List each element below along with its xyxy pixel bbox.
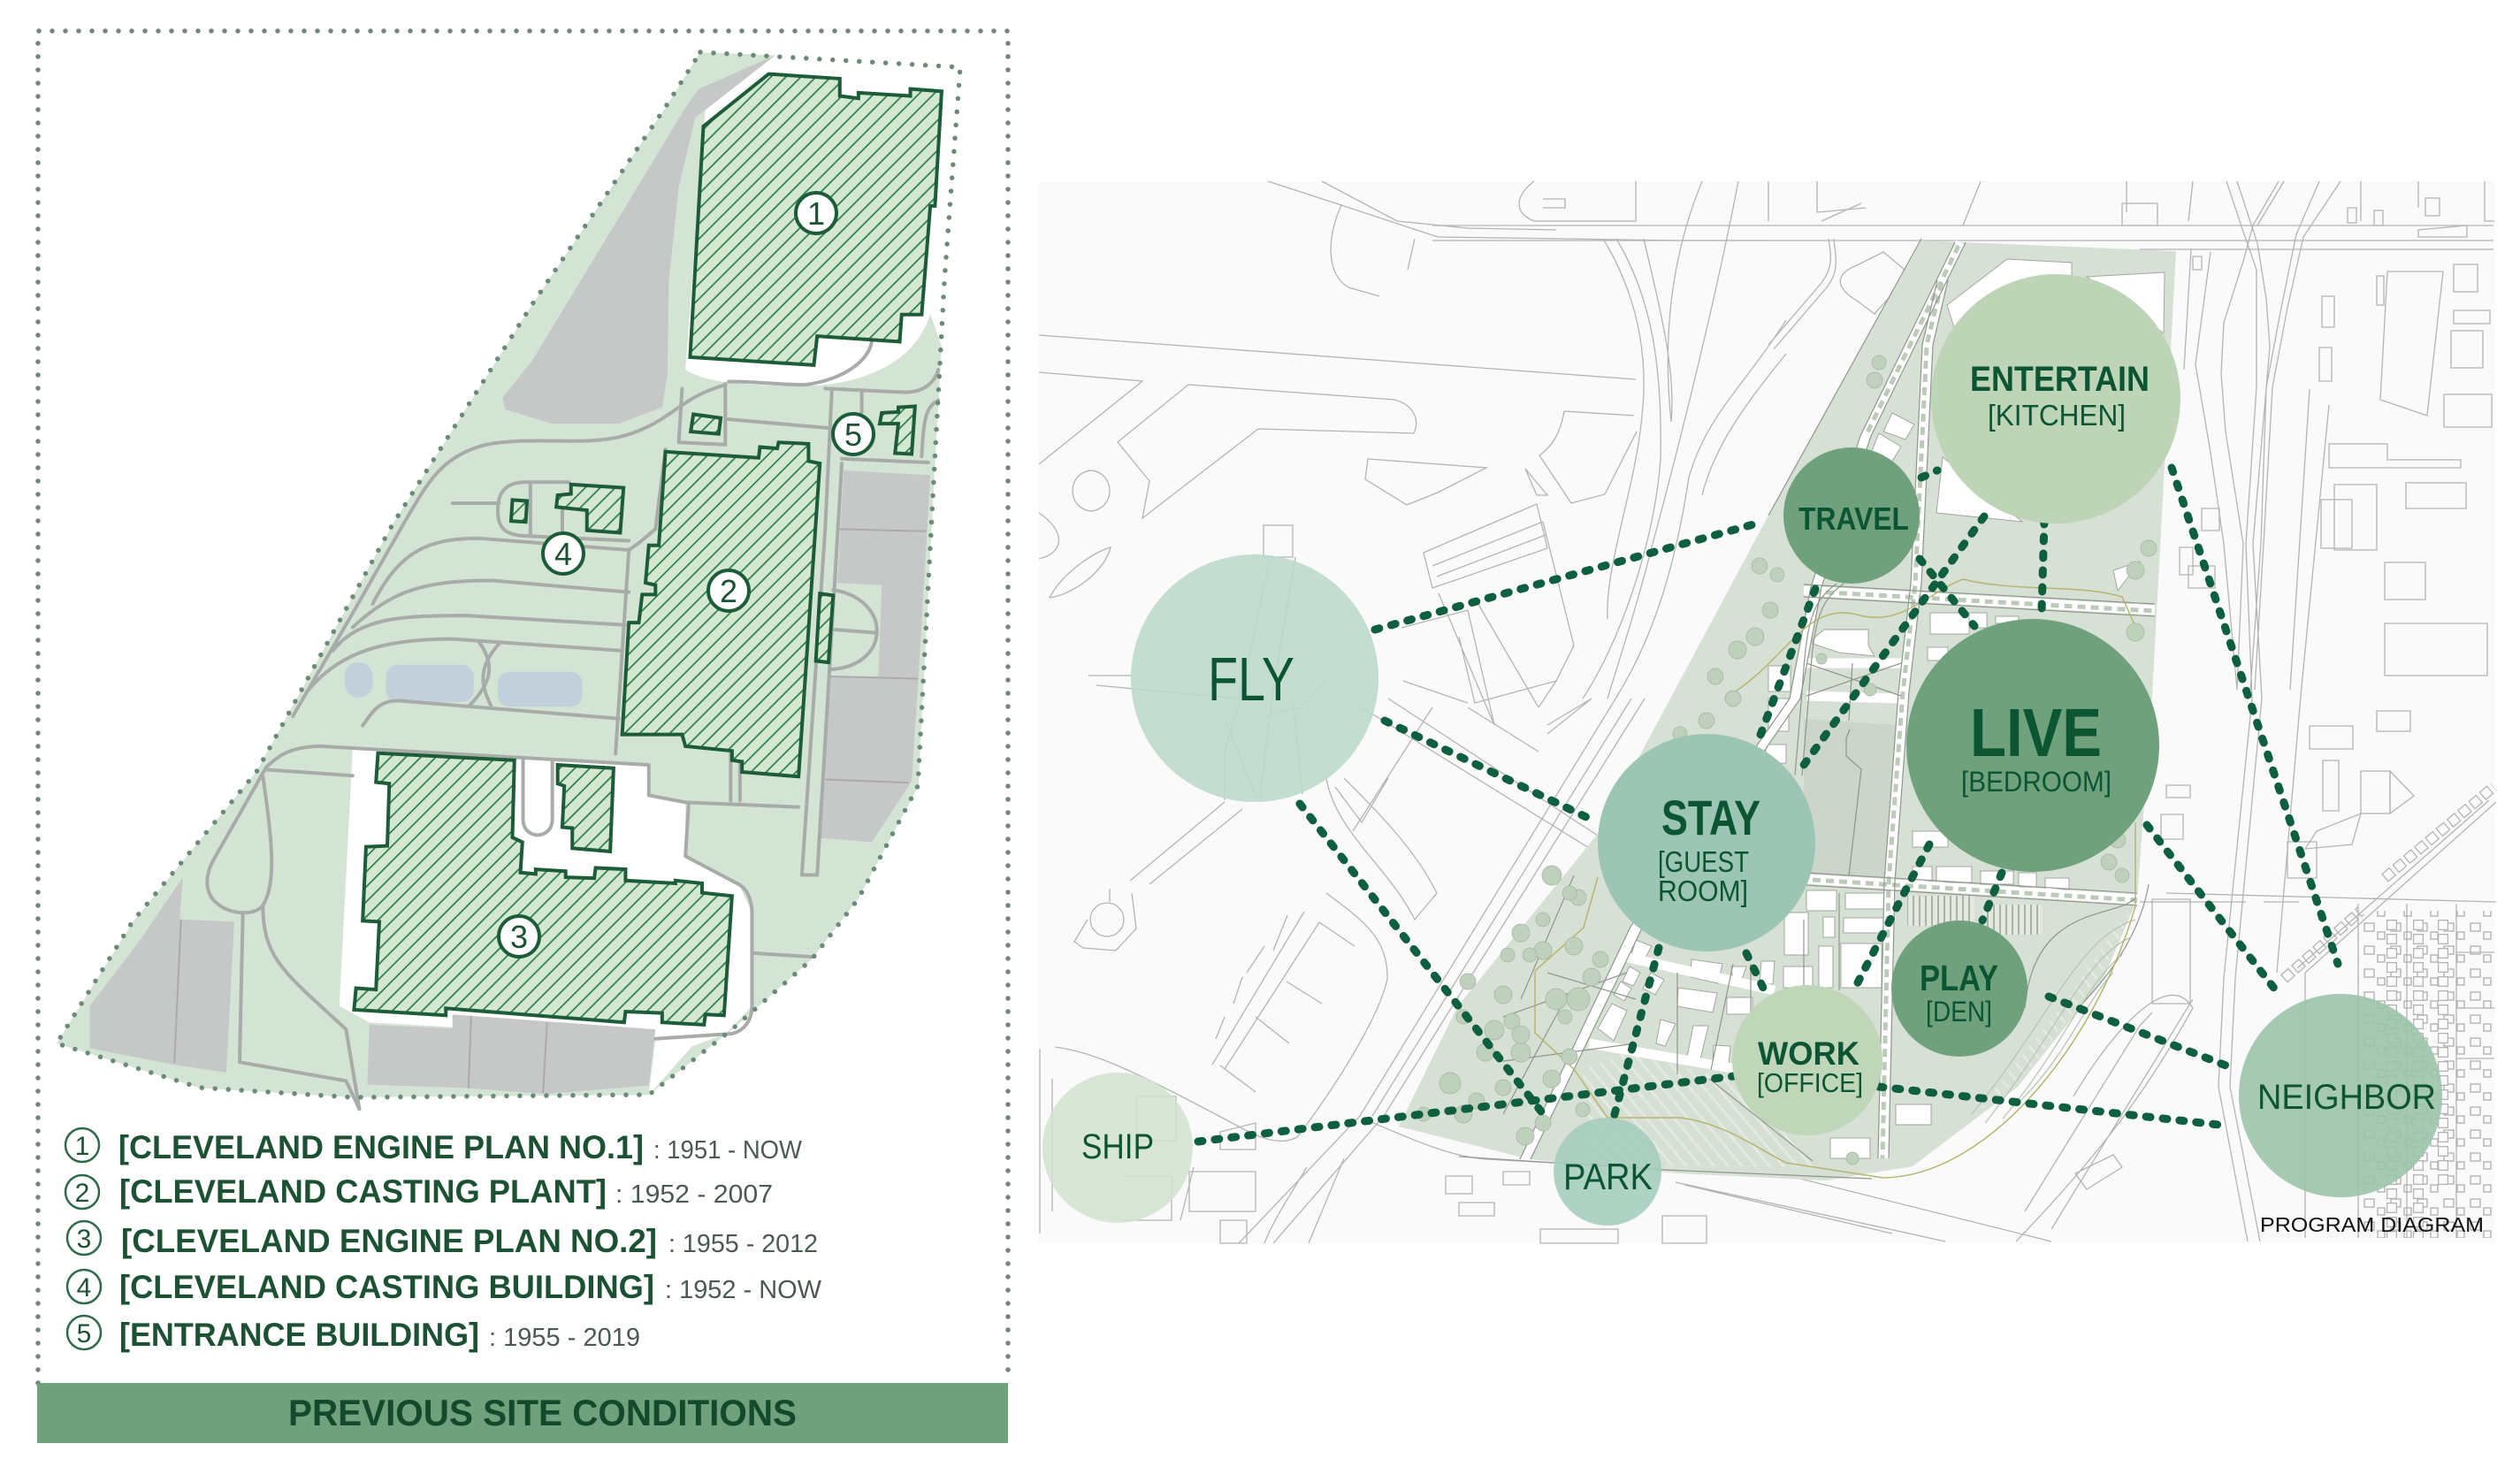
- legend: [65, 1128, 822, 1353]
- field stripes: [1907, 896, 2043, 935]
- retention ponds: [345, 662, 583, 707]
- central lawn: [1804, 719, 1898, 878]
- trees: [1417, 355, 2157, 1165]
- map marker 4: [543, 533, 584, 574]
- legend row 1: : 1951 - NOW: [653, 1136, 803, 1165]
- building: cleveland engine plant no.1: [690, 74, 942, 365]
- node: stay: STAY: [1661, 790, 1760, 845]
- map marker 5: [833, 414, 874, 455]
- white building footprints: [1598, 259, 2165, 1158]
- dotted panel frame: [38, 31, 1008, 1383]
- node: entertain: ENTERTAIN: [1970, 360, 2150, 399]
- site ground: [1399, 241, 2176, 1180]
- legend row 1: [CLEVELAND ENGINE PLAN NO.1]: [118, 1129, 644, 1165]
- node: park: [1554, 1118, 1661, 1226]
- south lawn stripes: [1583, 911, 2131, 1167]
- site roads: [207, 341, 938, 1109]
- node: ship: SHIP: [1081, 1127, 1154, 1166]
- node: fly: FLY: [1208, 645, 1294, 714]
- building: cleveland casting plant: [622, 442, 820, 776]
- node: neighbor: NEIGHBOR: [2257, 1078, 2436, 1117]
- node: neighbor: [2239, 994, 2442, 1197]
- site ground: [57, 52, 942, 1097]
- node: live: LIVE: [1970, 695, 2102, 771]
- building: cleveland casting building: [556, 485, 623, 532]
- legend row 3: 3: [77, 1225, 91, 1254]
- legend row 2: 2: [75, 1179, 89, 1208]
- legend row 5: [67, 1316, 640, 1353]
- site boundary dotted line: [57, 52, 960, 1097]
- legend row 2: [CLEVELAND CASTING PLANT]: [119, 1173, 607, 1210]
- map marker 4: 4: [554, 536, 572, 572]
- map marker 3: [499, 916, 539, 957]
- legend row 5: : 1955 - 2019: [489, 1324, 640, 1352]
- legend row 4: : 1952 - NOW: [665, 1276, 822, 1304]
- east buildings: [2075, 198, 2492, 1189]
- node: work: [1732, 985, 1882, 1135]
- node: work: WORK: [1758, 1035, 1859, 1072]
- white yard around building 3: [340, 749, 752, 1095]
- map marker 2: 2: [720, 573, 737, 609]
- map marker 1: [796, 193, 836, 233]
- panel: previous site conditions: [37, 31, 1008, 1443]
- east rail lines: [2150, 181, 2341, 1241]
- building: entrance building: [880, 407, 915, 455]
- node: travel: [1783, 447, 1920, 584]
- street tree rows: [1813, 246, 2155, 1158]
- node: entertain: [KITCHEN]: [1988, 399, 2126, 432]
- site streets: [1525, 242, 2155, 1159]
- node: play: [DEN]: [1926, 996, 1992, 1027]
- node: work: [OFFICE]: [1757, 1067, 1863, 1098]
- map marker 1: 1: [807, 195, 825, 232]
- node: stay: [GUEST: [1658, 845, 1749, 878]
- legend row 1: 1: [75, 1132, 89, 1161]
- building: cleveland engine plant no.2: [354, 753, 732, 1025]
- underlying lines inside fly circle: [1088, 525, 1326, 1220]
- legend row 4: [CLEVELAND CASTING BUILDING]: [119, 1269, 654, 1305]
- legend row 3: [67, 1221, 818, 1259]
- node: ship: [1042, 1073, 1193, 1223]
- map background: [1039, 181, 2494, 1243]
- context linework: [1039, 181, 2494, 1243]
- building: casting building annex: [511, 500, 527, 522]
- legend row 3: [CLEVELAND ENGINE PLAN NO.2]: [121, 1223, 657, 1259]
- legend row 3: : 1955 - 2012: [668, 1230, 818, 1258]
- legend row 2: : 1952 - 2007: [615, 1180, 773, 1209]
- node: live: [BEDROOM]: [1961, 766, 2111, 798]
- node: play: PLAY: [1920, 958, 1998, 998]
- building: engine plant annex: [558, 765, 614, 852]
- node: stay: [1598, 734, 1815, 951]
- node: fly: [1131, 554, 1378, 802]
- connection lines: [1198, 468, 2338, 1142]
- street edges: [1459, 239, 2155, 1179]
- map marker 3: 3: [510, 919, 528, 955]
- node: live: [1906, 619, 2159, 872]
- program diagram caption: PROGRAM DIAGRAM: [2260, 1213, 2484, 1236]
- legend row 4: 4: [77, 1273, 91, 1302]
- node: stay: ROOM]: [1658, 875, 1748, 907]
- building: casting plant annex: [816, 593, 833, 662]
- node: play: [1891, 920, 2027, 1057]
- panel title bar: [37, 1383, 1008, 1443]
- legend row 5: [ENTRANCE BUILDING]: [119, 1317, 479, 1353]
- terraced arc lawn: [1972, 920, 2135, 1123]
- node: park: PARK: [1563, 1156, 1653, 1197]
- building: small gatehouse: [691, 415, 721, 434]
- map marker 5: 5: [844, 416, 862, 453]
- node: travel: TRAVEL: [1798, 500, 1909, 537]
- trail: [1535, 579, 2140, 1178]
- site plan: [57, 52, 942, 1109]
- neighborhood houses: [2166, 787, 2496, 1238]
- development site plan: [1399, 239, 2176, 1180]
- node: entertain: [1931, 274, 2180, 523]
- legend row 5: 5: [77, 1319, 91, 1348]
- map marker 2: [708, 570, 749, 611]
- panel title bar: PREVIOUS SITE CONDITIONS: [288, 1392, 797, 1433]
- panel: program diagram: [1039, 181, 2496, 1243]
- parking lots: [90, 55, 930, 1094]
